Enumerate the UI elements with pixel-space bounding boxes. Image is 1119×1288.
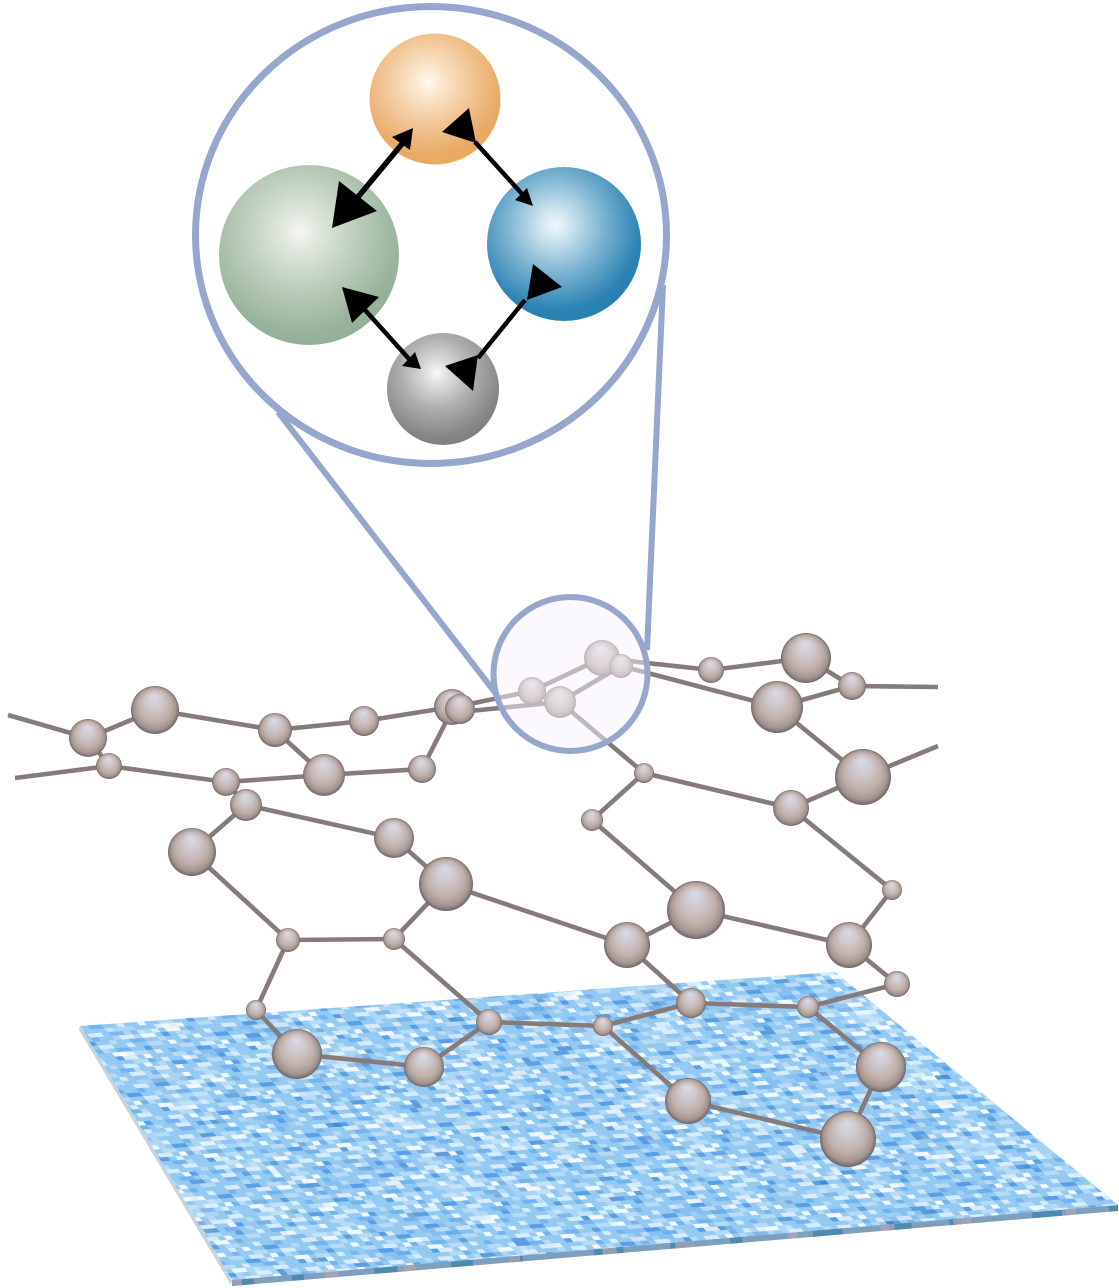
magnification callout lines bbox=[278, 285, 663, 695]
arrow: orange to blue bbox=[442, 108, 533, 206]
sphere: gray bbox=[387, 333, 499, 445]
lens: small magnifier circle bbox=[494, 597, 648, 751]
inset: large magnified circle bbox=[196, 6, 666, 464]
atoms: lower molecular sheet bbox=[246, 988, 906, 1167]
sphere: orange bbox=[370, 34, 500, 164]
arrow: green to gray bbox=[342, 287, 421, 369]
arrow: blue to gray bbox=[445, 264, 562, 391]
atoms: middle molecular sheet bbox=[168, 789, 910, 997]
atoms: upper molecular sheet bbox=[69, 633, 891, 831]
sphere: green bbox=[219, 165, 399, 345]
arrow: orange to green bbox=[332, 128, 413, 228]
molecular bonds bbox=[8, 658, 938, 1139]
sphere: blue bbox=[487, 167, 641, 321]
surface: blue pixel-textured plane bbox=[79, 972, 1118, 1286]
